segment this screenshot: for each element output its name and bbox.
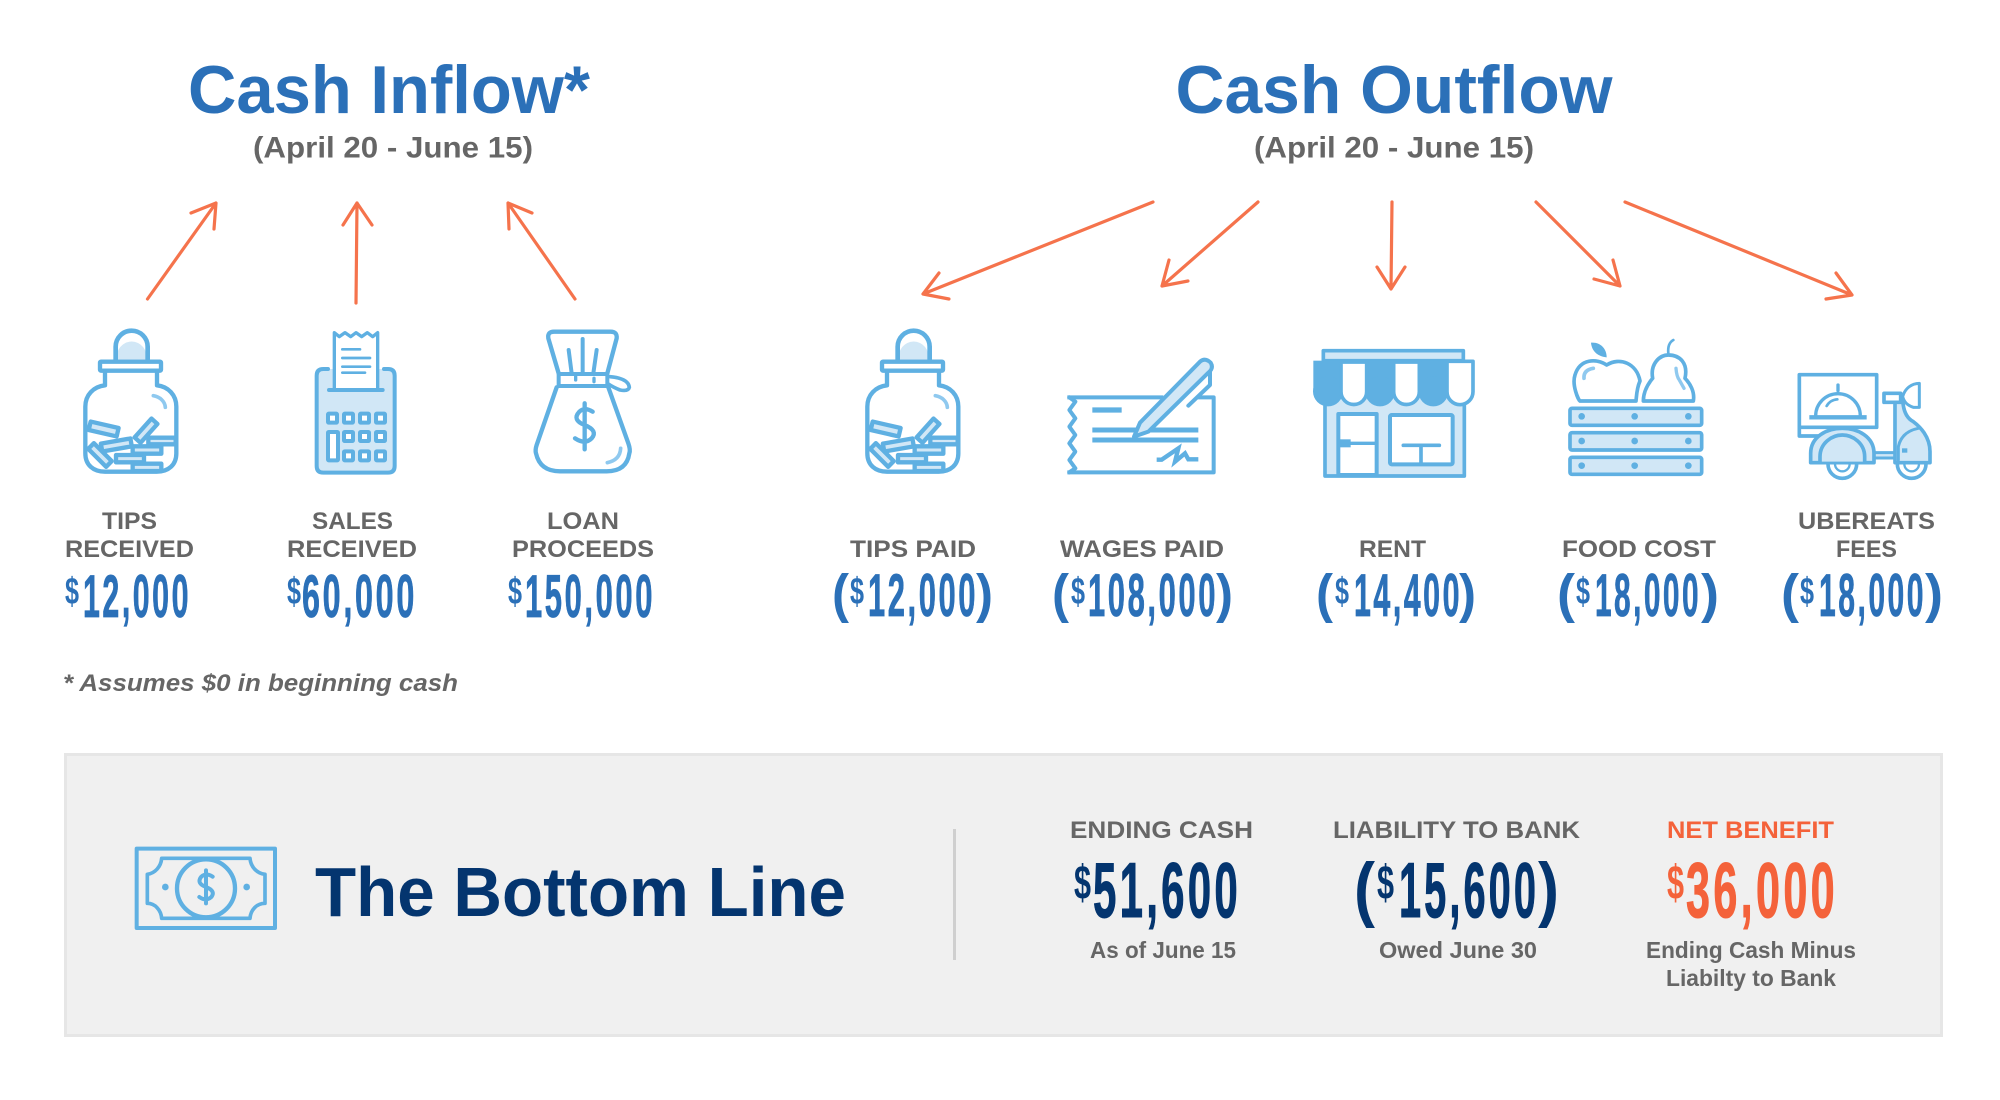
item: tips received — [65, 331, 194, 630]
amount: (108,000) — [1052, 562, 1233, 629]
label: food cost: FOOD COST — [1562, 536, 1716, 563]
amount: 12,000 — [65, 563, 191, 630]
title: cash inflow: Cash Inflow* — [188, 52, 591, 128]
amount: (15,600): 15,600 — [1399, 846, 1539, 934]
amount: 12,000: $ — [65, 571, 79, 613]
amount: (108,000): 108,000 — [1088, 562, 1218, 629]
panel: the bottom line — [66, 754, 1942, 1036]
amount: 60,000: 60,000 — [302, 563, 417, 630]
item: sales received — [287, 333, 417, 630]
label: ubereats fees: UBEREATS — [1798, 508, 1935, 535]
amount: (12,000) — [832, 562, 993, 629]
amount: 51,600 — [1074, 846, 1241, 934]
arrow: sales to inflow — [343, 203, 372, 303]
label: sales received: SALES — [312, 508, 393, 535]
amount: (14,400): $ — [1335, 571, 1349, 613]
label: sales received: RECEIVED — [287, 536, 417, 563]
icon: check and pen — [1067, 360, 1214, 472]
label: liability to bank: LIABILITY TO BANK — [1333, 817, 1580, 844]
heading: the bottom line: The Bottom Line — [315, 853, 846, 931]
amount: 150,000: 150,000 — [525, 563, 655, 630]
amount: (14,400) — [1316, 562, 1476, 629]
arrow: tips to inflow — [148, 203, 216, 299]
note: as of june 15: As of June 15 — [1090, 937, 1236, 963]
amount: (14,400): 14,400 — [1354, 562, 1462, 629]
note: ending cash minus liability: Ending Cash Minus — [1646, 937, 1856, 963]
metric: ending cash — [1070, 817, 1253, 963]
amount: 150,000: $ — [508, 571, 522, 613]
amount: (15,600) — [1354, 846, 1559, 934]
item: food cost — [1557, 340, 1719, 629]
icon: tip jar — [867, 331, 958, 472]
amount: (15,600): $ — [1377, 857, 1394, 910]
icon: delivery scooter — [1799, 375, 1930, 478]
icon: money bag — [536, 332, 630, 471]
arrow: outflow to food — [1536, 202, 1620, 286]
footnote: * Assumes $0 in beginning cash — [63, 670, 458, 697]
amount: (14,400): ) — [1459, 564, 1476, 624]
label: net benefit: NET BENEFIT — [1667, 817, 1834, 844]
amount: (18,000): ) — [1925, 564, 1943, 624]
title: cash outflow: Cash Outflow — [1176, 52, 1614, 128]
item: rent — [1313, 351, 1476, 629]
amount: (18,000): ( — [1781, 564, 1799, 624]
panel: cash inflow — [63, 52, 655, 697]
item: loan proceeds — [508, 332, 655, 630]
amount: (12,000): ) — [976, 564, 993, 624]
amount: (108,000): ( — [1052, 564, 1069, 624]
note: owed june 30: Owed June 30 — [1379, 937, 1537, 963]
amount: (15,600): ( — [1354, 850, 1375, 929]
label: loan proceeds: LOAN — [547, 508, 619, 535]
amount: 60,000: $ — [287, 571, 301, 613]
label: rent: RENT — [1359, 536, 1426, 563]
arrow: outflow to wages — [1162, 202, 1258, 286]
amount: (18,000): $ — [1576, 571, 1590, 613]
label: ubereats fees — [1798, 508, 1935, 563]
amount: 51,600: 51,600 — [1093, 846, 1241, 934]
label: tips received: TIPS — [102, 508, 157, 535]
label: wages paid: WAGES PAID — [1060, 536, 1224, 563]
icon: cash register — [317, 333, 395, 473]
label: tips received: RECEIVED — [65, 536, 194, 563]
amount: (18,000): ( — [1557, 564, 1575, 624]
amount: (15,600): ) — [1538, 850, 1559, 929]
amount: (18,000): $ — [1800, 571, 1814, 613]
amount: (12,000): 12,000 — [868, 562, 978, 629]
amount: (18,000) — [1781, 562, 1943, 629]
amount: 150,000 — [508, 563, 655, 630]
amount: (12,000): ( — [832, 564, 849, 624]
amount: 12,000: 12,000 — [83, 563, 191, 630]
label: tips paid: TIPS PAID — [850, 536, 976, 563]
icon: dollar bill — [137, 849, 275, 928]
amount: (108,000): $ — [1071, 571, 1085, 613]
icon: storefront — [1313, 351, 1473, 476]
amount: (14,400): ( — [1316, 564, 1333, 624]
item: wages paid — [1052, 360, 1233, 629]
amount: 36,000 — [1667, 846, 1838, 934]
amount: (12,000): $ — [850, 571, 864, 613]
arrow: outflow to tips paid — [923, 202, 1153, 299]
metric: liability to bank — [1333, 817, 1580, 963]
label: tips received — [65, 508, 194, 563]
item: tips paid — [832, 331, 993, 629]
icon: tip jar — [85, 331, 176, 472]
amount: 36,000: 36,000 — [1686, 846, 1838, 934]
arrow: outflow to rent — [1377, 202, 1405, 289]
subtitle: inflow dates: (April 20 - June 15) — [253, 132, 533, 164]
panel: cash outflow — [832, 52, 1943, 629]
arrow: outflow to ubereats — [1625, 202, 1852, 299]
arrow: loan to inflow — [508, 203, 575, 299]
amount: (18,000): 18,000 — [1595, 562, 1701, 629]
amount: (18,000): ) — [1701, 564, 1719, 624]
item: ubereats fees — [1781, 375, 1943, 629]
icon: fruit crate — [1570, 340, 1702, 474]
label: ubereats fees: FEES — [1836, 536, 1897, 563]
subtitle: outflow dates: (April 20 - June 15) — [1254, 132, 1534, 164]
amount: 60,000 — [287, 563, 417, 630]
label: loan proceeds — [512, 508, 654, 563]
label: loan proceeds: PROCEEDS — [512, 536, 654, 563]
label: sales received — [287, 508, 417, 563]
metric: net benefit — [1646, 817, 1856, 991]
note: ending cash minus liability — [1646, 937, 1856, 991]
note: ending cash minus liability: Liabilty to Bank — [1666, 965, 1836, 991]
amount: (18,000) — [1557, 562, 1719, 629]
amount: 36,000: $ — [1667, 857, 1684, 910]
label: ending cash: ENDING CASH — [1070, 817, 1253, 844]
amount: (108,000): ) — [1216, 564, 1233, 624]
amount: 51,600: $ — [1074, 857, 1091, 910]
